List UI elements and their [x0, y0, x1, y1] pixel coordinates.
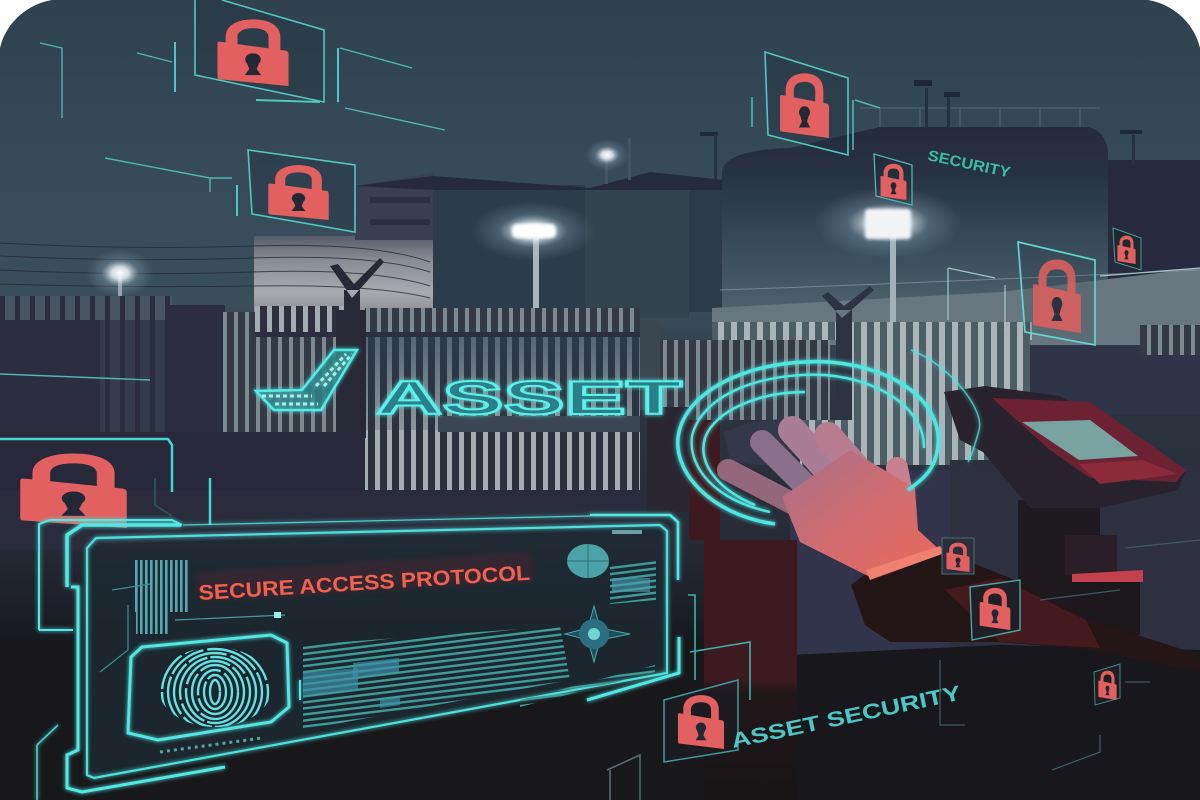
access terminal [944, 386, 1186, 640]
panel inner frame [87, 525, 667, 778]
fingerprint [160, 648, 270, 727]
compass badge [565, 606, 630, 662]
turnstile post [647, 407, 797, 800]
label: ASSET SECURITY: ASSET SECURITY [729, 682, 963, 753]
glowing scan rings [678, 350, 980, 524]
label: SECURITY: SECURITY [926, 147, 1012, 181]
street light: far left [86, 249, 154, 310]
street light: centre [471, 201, 595, 338]
security fence [0, 296, 1200, 490]
secure access protocol panel [37, 515, 679, 800]
globe badge [567, 544, 609, 578]
data text lines [303, 626, 655, 730]
panel outer frame [37, 515, 679, 800]
hand [728, 430, 945, 580]
status dots [160, 738, 262, 752]
lock card: translucent right [948, 242, 1200, 345]
panel barcode [100, 560, 285, 672]
lock card: asset security [664, 680, 738, 762]
side readout [610, 530, 656, 604]
fence post with Y-arms: left [330, 258, 384, 438]
hud lines: upper left [0, 43, 445, 380]
street light: right [814, 187, 962, 322]
panel right brackets [607, 595, 750, 800]
fingerprint scanner frame [128, 635, 300, 740]
lock card: second left [237, 150, 355, 232]
hud lines: lower right [940, 540, 1200, 770]
hud lines: around big lock [0, 439, 210, 525]
building: lower right lit wall [712, 268, 1200, 345]
checkmark icon [256, 350, 357, 410]
panel heading glow [197, 552, 533, 602]
reader pad under hand [724, 419, 800, 468]
sleeve [851, 552, 1200, 672]
building: left warehouse [254, 138, 724, 320]
white rounded corners [0, 0, 1200, 48]
barbed wire [0, 243, 1200, 298]
street light: small distant [585, 139, 629, 171]
headline: ASSET: ASSET [376, 371, 683, 424]
fence post with Y-arms: right [822, 286, 874, 420]
lock card: top right [752, 52, 880, 155]
lock card: on sleeve [970, 580, 1020, 640]
building: storage tank [700, 80, 1200, 310]
heading text: SECURE ACCESS PROTOCOL [198, 562, 531, 605]
lock card: small near tank [874, 154, 912, 205]
big lock: lower left [20, 454, 127, 528]
ground [0, 432, 1200, 800]
lock card: top left [175, 0, 338, 102]
lock card: lower right [1094, 664, 1120, 705]
lock card: beside cuff [942, 538, 974, 574]
lock card: small right [1113, 228, 1141, 270]
